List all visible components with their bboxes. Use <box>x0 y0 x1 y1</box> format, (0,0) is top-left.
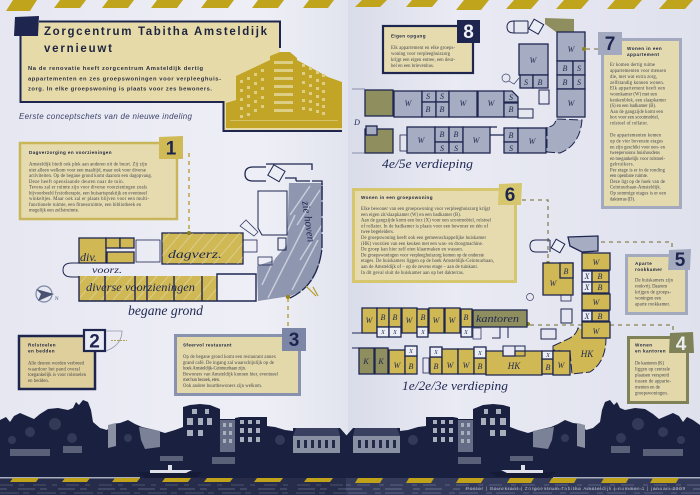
upper wing rooms: X <box>380 330 385 336</box>
dagverzorging room: dagverz. <box>168 247 222 261</box>
heading 2: Rolstoelen <box>28 342 56 348</box>
right tower rooms: W <box>593 298 601 307</box>
body 5: krijgen de groeps- <box>635 290 671 296</box>
upper wing rooms: B <box>464 313 469 322</box>
body 7: dakterras (D). <box>610 198 635 202</box>
body 7 <box>610 63 667 202</box>
intro text <box>28 66 221 92</box>
right tower rooms: W <box>568 99 576 108</box>
body 7: gebruikers. <box>610 162 634 168</box>
body 7: De appartementen komen <box>610 134 662 138</box>
badge 3: 3 <box>289 330 299 351</box>
lower wing rooms: K <box>362 357 369 366</box>
upper wing rooms: W <box>488 99 496 108</box>
body 7: appartementen voor mensen <box>610 69 667 74</box>
terrace marker: D <box>353 118 360 127</box>
upper wing rooms: S <box>426 92 430 101</box>
body 8: krijgt een eigen entree, een deur- <box>391 58 455 63</box>
body 3 <box>183 355 279 389</box>
body 6: etages. De huiskamers liggen op de hoek Amsteldijk-Ceintuurbaan, <box>361 259 494 264</box>
heading 5: rookkamer <box>635 267 663 272</box>
handwritten label: 1e/2e/3e verdieping: 1e/2e/3e verdieping <box>402 378 509 393</box>
badge 8: 8 <box>463 22 474 43</box>
body 1: mogelijk een zelfstruimte. <box>29 208 79 214</box>
body 2: en bedden. <box>28 379 49 384</box>
right tower rooms: B <box>563 64 568 73</box>
body 2 <box>28 362 87 384</box>
panel 3: restaurant <box>176 328 306 394</box>
body 8: bel en een brievenbus. <box>391 64 434 69</box>
upper wing rooms: W <box>460 99 468 108</box>
upper wing rooms: S <box>440 92 444 101</box>
building illustration <box>226 52 342 128</box>
panel 7: wonen in een appartement <box>598 32 680 208</box>
upper wing rooms <box>362 308 527 339</box>
badge 6 <box>498 183 522 206</box>
right tower rooms: B <box>598 312 603 321</box>
lower wing rooms: W <box>418 136 426 145</box>
heading 2 <box>28 342 56 354</box>
upper wing rooms: W <box>433 316 441 325</box>
body 3: met hun bezoek, eten. <box>183 378 220 383</box>
panel 1: dagverzorging <box>20 136 183 219</box>
lower wing rooms: X <box>408 349 413 355</box>
body 7: en toegankelijk voor rolstoel- <box>610 157 665 162</box>
grey tower section <box>257 181 323 301</box>
body 8 <box>391 46 455 69</box>
heading 4 <box>635 342 666 354</box>
boat right <box>490 465 556 478</box>
upper wing rooms: W <box>406 316 414 325</box>
lower wing rooms: S <box>454 144 458 153</box>
body 1 <box>29 162 152 214</box>
body 7: rolstoel of rollator. <box>610 122 648 126</box>
body 5: rookvrij. Daarom <box>635 284 667 290</box>
body 4: liggen op centrale <box>635 368 670 372</box>
upper wing rooms: kantoren <box>476 314 519 325</box>
body 2: Alle deuren worden verbreed <box>28 362 85 366</box>
panel 2: rolstoelen <box>19 330 127 389</box>
middle block rooms <box>519 44 549 104</box>
right tower rooms <box>557 32 585 117</box>
right tower rooms: X <box>584 283 591 292</box>
upper wing rooms: X <box>392 330 397 336</box>
lower wing rooms: K <box>377 357 384 366</box>
dagverzorging room <box>162 231 243 264</box>
body 4: tussen de apparte- <box>635 380 671 384</box>
lower wing rooms: W <box>447 361 455 370</box>
title: Zorgcentrum Tabitha Amsteldijk <box>44 26 268 38</box>
upper wing rooms: W <box>405 99 413 108</box>
top left rooms <box>79 238 272 265</box>
body 7: Elk appartement heeft een <box>610 86 666 92</box>
body 5: woningen een <box>635 296 662 302</box>
badge 1 <box>159 136 183 160</box>
title corner square <box>14 16 39 36</box>
lower wing rooms: X <box>433 350 438 356</box>
badge 7 <box>598 32 622 55</box>
floor plan: begane grond <box>63 164 323 301</box>
upper wing rooms: B <box>421 313 426 322</box>
lower wing rooms: B <box>546 363 551 372</box>
heading 1: Dagverzorging en voorzieningen <box>29 150 112 155</box>
body 6: De groepswoningen voor verpleeghuiszorg komen op de onderste <box>361 254 484 258</box>
heading 8: Eigen opgang <box>391 34 426 38</box>
boat <box>137 465 203 478</box>
middle block: B <box>564 267 569 276</box>
bend <box>547 119 582 153</box>
upper rooms and lift <box>240 164 312 250</box>
heading 3: Sfeervol restaurant <box>183 342 232 348</box>
lower wing rooms: S <box>440 144 444 153</box>
body 5 <box>635 278 674 308</box>
upper wing rooms: B <box>440 105 445 114</box>
handwritten label: begane grond: begane grond <box>128 304 204 319</box>
right tower rooms: B <box>598 272 603 281</box>
body 1: activiteiten. Op de begane grond komt daarom een dagopvang. <box>29 174 152 179</box>
right tower rooms: X <box>584 312 591 321</box>
badge 5: 5 <box>675 250 686 271</box>
middle block rooms: B <box>538 78 543 87</box>
title panel: vernieuwt <box>44 43 112 55</box>
body 7: (S) en een badkamer (B). <box>610 104 656 109</box>
title panel <box>14 16 342 131</box>
upper wing rooms: S <box>509 93 513 102</box>
body 1: bijvoorbeeld fysiotherapie, een huisartspraktijk en eventueel <box>29 191 148 196</box>
body 6: (HK) voorzien van een keuken met een was- en droogmachine. <box>361 242 483 247</box>
grey tower section: zie hoven <box>299 199 317 243</box>
body 7: box voor een scootmobiel, <box>610 116 659 120</box>
body 7: op de vier bovenste etages <box>610 140 663 144</box>
intro text: appartementen en zes groepswoningen voor verpleeghuis- <box>28 76 221 82</box>
floor plan: 1e/2e/3e verdieping <box>352 236 610 375</box>
top lift and roof terrace <box>502 18 574 84</box>
body 8: Elk appartement en elke groeps- <box>391 46 455 51</box>
lower wing rooms: W <box>529 137 537 146</box>
skyline left <box>0 400 347 495</box>
body 6: een eigen zit/slaapkamer (W) en een badkamer (B). <box>361 213 461 218</box>
lower wing rooms: W <box>394 361 402 370</box>
compass icon <box>36 286 59 302</box>
top lift and grey room <box>530 236 598 253</box>
badge 4: 4 <box>676 334 687 355</box>
body 1: functionele ruimte, een fitnessruimte, een bibliotheek en <box>29 203 142 208</box>
body 3: Ook andere buurtbewoners zijn welkom. <box>183 384 262 389</box>
lower wing rooms: B <box>440 130 445 139</box>
body 8: woning voor verpleeghuiszorg <box>391 52 451 57</box>
heading 5 <box>635 261 663 272</box>
upper wing rooms: B <box>393 313 398 322</box>
body 7: keukenblok, een slaapkamer <box>610 98 666 104</box>
panel 6: wonen in een groepswoning <box>354 183 522 282</box>
body 7: Op sommige etages is er een <box>610 192 667 196</box>
heading 2: en bedden <box>28 348 55 354</box>
body 6: De groep kan hier zelf eten klaarmaken en wassen. <box>361 248 463 252</box>
connector 5 <box>589 240 672 249</box>
corridor end <box>63 263 122 277</box>
lower wing rooms: X <box>545 353 550 359</box>
body 7: een openbare ruimte. <box>610 174 648 179</box>
body 6: of rollator. In de badkamer is plaats voor een bewoner en één of <box>361 224 488 230</box>
body 6: In dit geval sluit de huiskamer aan op het dakterras. <box>361 271 464 276</box>
body 4: menten en de <box>635 386 660 390</box>
right tower rooms: S <box>577 64 581 73</box>
body 7: Per etage is er in de ronding <box>610 168 666 174</box>
body 3: hoek Amsteldijk-Ceintuurbaan zijn. <box>183 367 246 372</box>
right tower rooms: B <box>598 283 603 292</box>
connector 7 <box>582 47 598 51</box>
badge 6: 6 <box>505 185 515 206</box>
body 1: winkeltjes. Maar ook zal er plaats blijven voor een multi- <box>29 197 149 202</box>
lower wing rooms: HK <box>507 361 521 371</box>
body 1: Tevens zal er ruimte zijn voor diverse voorzieningen zoals <box>29 186 147 190</box>
body 7: Ceintuurbaan-Amsteldijk. <box>610 186 661 190</box>
upper wing rooms: X <box>463 330 468 336</box>
huiskamer corner: HK <box>580 349 594 359</box>
body 3: grand café. De ingang zal waarschijnlijk op de <box>183 361 274 366</box>
right tower rooms: X <box>584 272 591 281</box>
body 6: Aan de gangzijde komt een box (X) voor een scootmobiel, rolstoel <box>361 218 492 224</box>
body 7: woonkamer (W) met een <box>610 92 658 98</box>
upper wing rooms: W <box>366 316 374 325</box>
body 4: De kantoren (K) <box>635 362 664 366</box>
lower wing rooms: X <box>477 351 482 357</box>
body 3: Op de begane grond komt een restaurant annex <box>183 355 277 360</box>
body 1: Amsteldijk biedt ook plek aan anderen uit de buurt. Zij zijn <box>29 162 148 168</box>
lower wing rooms: W <box>473 136 481 145</box>
upper wing rooms: B <box>509 105 514 114</box>
floor plan: 4e/5e verdieping <box>352 18 585 153</box>
body 6: aan de Amsteldijk of – op de zevens etage – aan de tuinkant. <box>361 265 478 270</box>
heading 7: Wonen in een <box>627 46 662 51</box>
compass icon: N <box>55 297 59 302</box>
lower wing rooms <box>359 346 570 375</box>
panel 5: aparte rookkamer <box>626 249 691 314</box>
body 6 <box>361 207 494 276</box>
lower wing rooms: B <box>478 362 483 371</box>
lower wing rooms <box>365 126 546 153</box>
terrace marker <box>352 89 365 153</box>
lower wing rooms: W <box>463 361 471 370</box>
body 7: Er komen dertig ruime <box>610 63 655 68</box>
upper wing rooms <box>365 90 533 118</box>
huiskamer corner <box>553 328 606 374</box>
top left rooms: div. <box>80 250 97 264</box>
upper wing rooms: W <box>449 316 457 325</box>
upper wing rooms: X <box>420 330 425 336</box>
connector 3 <box>287 298 289 328</box>
right tower rooms: S <box>577 78 581 87</box>
body 1: Deze heeft openslaande deuren naar de tuin. <box>29 180 124 185</box>
lower wing rooms: B <box>454 130 459 139</box>
badge 7: 7 <box>605 34 615 55</box>
lower wing rooms: B <box>409 362 414 371</box>
right tower rooms: W <box>593 327 601 336</box>
right tower rooms: W <box>593 258 601 267</box>
heading 7: appartement <box>627 52 660 57</box>
lower wing rooms: W <box>558 361 566 370</box>
badge 1: 1 <box>166 138 177 160</box>
upper wing rooms: B <box>426 105 431 114</box>
right tower rooms <box>582 253 610 338</box>
middle block rooms: W <box>530 56 538 65</box>
body 7: tweepersoons huishoudens <box>610 151 660 156</box>
heading 4: Wonen <box>635 342 652 348</box>
upper wing rooms: B <box>381 313 386 322</box>
body 5: De huiskamers zijn <box>635 278 674 284</box>
body 7: zelfstandig kunnen wonen. <box>610 81 664 86</box>
body 4: groepswoningen. <box>635 392 668 396</box>
footer credit: Poster | Bouwkrant | Zorgcentrum Tabitha Amsteldijk | nummer 1 | januari 2009 <box>466 486 685 491</box>
connector 1 to floor plan <box>188 153 190 232</box>
lower wing rooms: B <box>509 131 514 140</box>
body 2: waardoor het pand overal <box>28 367 81 372</box>
badge 2: 2 <box>89 332 100 352</box>
middle block rooms: S <box>524 78 528 87</box>
middle block <box>526 263 573 339</box>
intro text: zorg. In elke groepswoning is plaats voor zes bewoners. <box>28 86 212 92</box>
middle block: W <box>550 279 558 288</box>
handwritten label: 4e/5e verdieping: 4e/5e verdieping <box>382 156 474 171</box>
exit arrow <box>306 286 318 296</box>
body 7: die, met wat extra zorg, <box>610 75 657 80</box>
corridor end lines <box>352 333 362 348</box>
bottom row rooms <box>79 274 256 301</box>
body 6: De groepswoning heeft ook een gemeenschappelijke huiskamer <box>361 236 486 241</box>
body 4: plaatsen verspreid <box>635 374 670 378</box>
bottom row rooms: diverse voorzieningen <box>86 280 195 294</box>
heading 4: en kantoren <box>635 348 666 354</box>
body 3: Bewoners van Amsteldijk kunnen hier, eventueel <box>183 372 279 377</box>
connector 4 <box>526 322 673 332</box>
heading 5: Aparte <box>635 261 652 266</box>
body 1: niet alleen welkom voor een maaltijd, maar ook voor diverse <box>29 168 146 173</box>
body 7: Aan de gangzijde komt een <box>610 110 664 115</box>
panel 4: wonen en kantoren <box>628 332 694 402</box>
body 5: aparte rookkamer. <box>635 302 670 308</box>
door icon <box>106 331 127 351</box>
right tower rooms: W <box>568 45 576 54</box>
heading 6: Wonen in een groepswoning <box>361 195 433 200</box>
lower wing rooms: B <box>434 362 439 371</box>
body 6: twee begeleiders. <box>361 230 394 235</box>
body 7: Deze ligt op de hoek van de <box>610 180 665 185</box>
bottom hazard stripes <box>10 478 679 483</box>
right tower rooms: B <box>563 78 568 87</box>
body 6: Elke bewoner van een groepswoning voor verpleeghuiszorg krijgt <box>361 207 491 212</box>
connector 6 <box>522 200 550 265</box>
lower wing rooms: S <box>509 144 513 153</box>
body 2: toegankelijk is voor rolstoelen <box>28 373 87 378</box>
skyline right <box>346 400 700 495</box>
body 4 <box>635 362 671 396</box>
intro text: Na de renovatie heeft zorgcentrum Amsteldijk dertig <box>28 66 203 72</box>
panel 8: eigen opgang <box>383 20 480 73</box>
section subtitle: Eerste conceptschets van de nieuwe indeling <box>19 112 193 121</box>
top hazard stripes <box>6 0 693 11</box>
heading 7 <box>627 46 662 57</box>
corridor end: voorz. <box>92 265 122 275</box>
body 7: en zijn geschikt voor een- en <box>610 146 666 150</box>
